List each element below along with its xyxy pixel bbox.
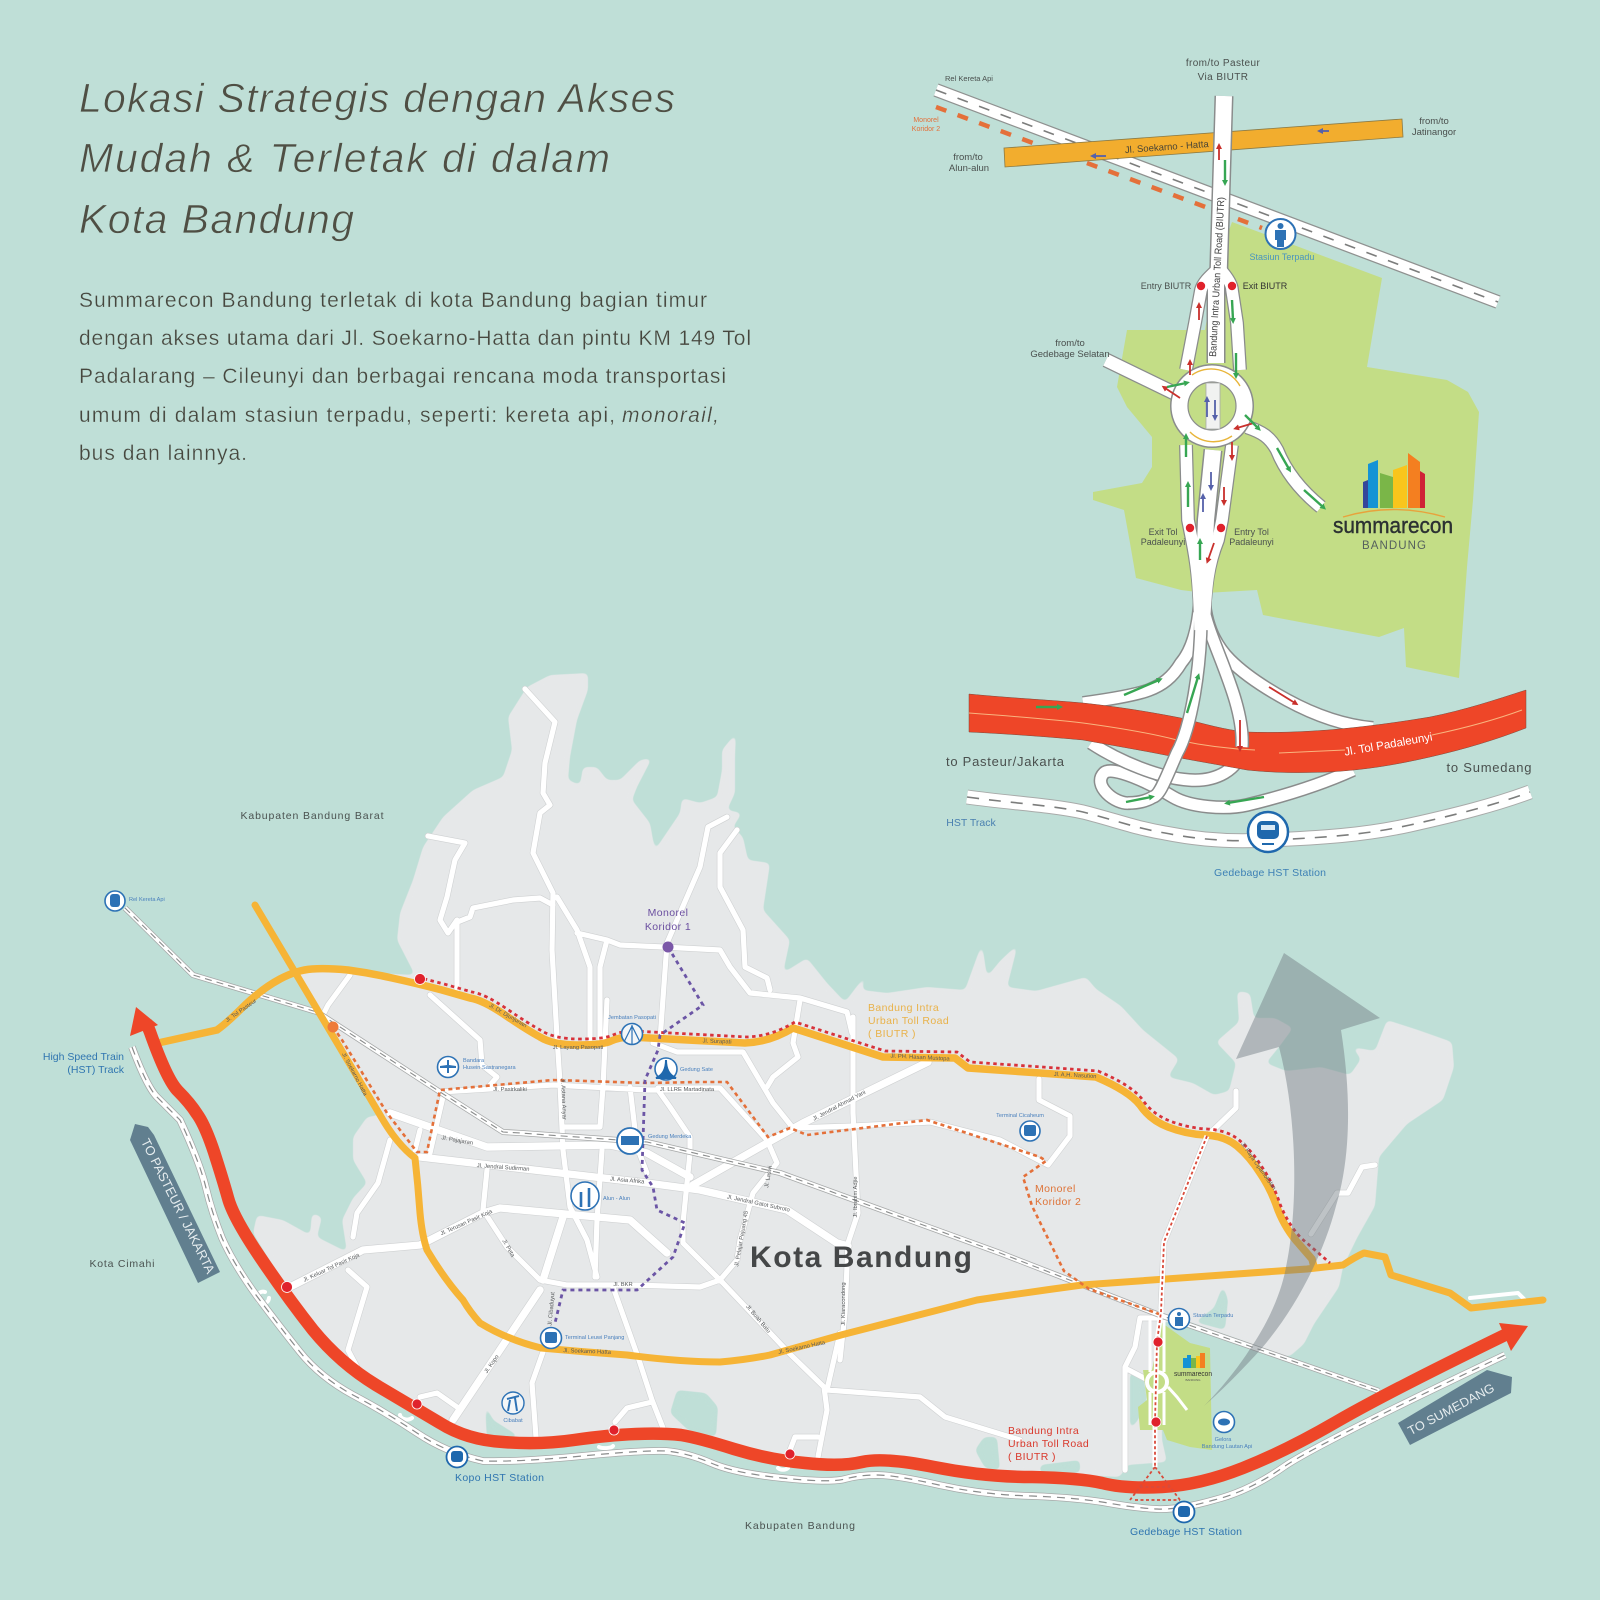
small landmark labels: Alun - Alun: [603, 1196, 630, 1202]
route and station labels: Kopo HST Station: [455, 1472, 544, 1484]
small landmark labels: Bandara: [463, 1058, 485, 1064]
icon: Kopo HST: [446, 1446, 468, 1468]
street labels: Jl. Kopo: [484, 1354, 501, 1375]
water pockets: [485, 1285, 1228, 1473]
icon: Gelora Bandung Lautan Api: [1214, 1412, 1234, 1432]
panel: city map: [43, 673, 1543, 1538]
Jl. Soekarno-Hatta road: Jl. Soekarno - Hatta: [1125, 139, 1210, 156]
title: [79, 75, 675, 242]
interchange labels: from/to: [953, 152, 983, 163]
street labels: Jl. Asia Afrika: [610, 1177, 645, 1186]
small logo: summarecon: [1174, 1371, 1212, 1378]
red toll road arrow: [130, 1007, 1528, 1488]
route and station labels: [43, 907, 1242, 1538]
street labels: Jl. Cibaduyut: [548, 1292, 556, 1326]
street labels: Jl. Soekarno Hatta: [778, 1340, 826, 1356]
body text: bus dan lainnya.: [79, 442, 247, 465]
small logo: BANDUNG: [1185, 1378, 1201, 1382]
route and station labels: ( BIUTR ): [1008, 1451, 1056, 1463]
interchange labels: Gedebage Selatan: [1030, 349, 1110, 360]
ramps over toll: [1128, 605, 1242, 803]
entry and exit dots: [1186, 282, 1236, 532]
small landmark labels: Gelora: [1215, 1437, 1232, 1443]
roundabout: [1170, 364, 1254, 448]
street labels: Jl. Laswi: [764, 1165, 774, 1188]
icon: Jembatan Pasopati: [622, 1024, 642, 1044]
railway line: [936, 90, 1498, 302]
street labels: Jl. Pelajar Pejuang 45: [734, 1211, 750, 1267]
big translucent direction arrow: [1204, 953, 1380, 1406]
interchange labels: Jatinangor: [1412, 127, 1456, 138]
small landmark labels: Bandung Lautan Api: [1202, 1444, 1252, 1450]
street labels: Jl. Tol Pasteur: [225, 998, 258, 1024]
interchange labels: Gedebage HST Station: [1214, 867, 1326, 879]
icon: Stasiun Terpadu: [1266, 219, 1296, 249]
BIUTR connector dashed: [1130, 1136, 1207, 1500]
interchange labels: Koridor 2: [912, 126, 940, 133]
route and station labels: Gedebage HST Station: [1130, 1526, 1242, 1538]
interchange labels: to Pasteur/Jakarta: [946, 754, 1065, 769]
street labels: Jl. Pajajaran: [441, 1135, 473, 1147]
small landmark labels: Husein Sastranegara: [463, 1065, 516, 1071]
small landmark labels: Stasiun Terpadu: [1193, 1313, 1233, 1319]
route and station labels: Monorel: [648, 907, 688, 919]
street labels: Jl. Terusan Pasir Koja: [440, 1209, 494, 1237]
small landmark labels: Cibabat: [503, 1418, 523, 1424]
route and station labels: Bandung Intra: [1008, 1425, 1079, 1437]
interchange labels: [912, 58, 1532, 879]
logo: Summarecon Bandung: [1333, 453, 1453, 552]
monorail corridor 2 dashes: [936, 107, 1262, 228]
HST track lower map: [132, 1047, 1505, 1509]
Jl. Soekarno-Hatta road: [1004, 119, 1403, 167]
street labels: Jl. Layang Pasopati: [553, 1045, 603, 1051]
body text: Summarecon Bandung terletak di kota Bandung bagian timur: [79, 289, 707, 312]
street labels: Jl. Jendral Gatot Subroto: [726, 1194, 790, 1214]
street labels: Jl. Jendral Sudirman: [477, 1163, 530, 1173]
yellow road: Soekarno-Hatta: [255, 905, 1543, 1362]
street labels: Jl. Astana Anyar: [559, 1078, 567, 1120]
map icons: [105, 891, 1234, 1522]
interchange labels: Exit Tol: [1149, 527, 1177, 537]
street labels: Jl. Kiaracondong: [841, 1282, 847, 1326]
yellow road: BIUTR north: [158, 969, 1314, 1267]
toll gate dots: [282, 974, 1163, 1459]
street labels: Jl. Peta: [500, 1239, 516, 1259]
route and station labels: Urban Toll Road: [868, 1015, 949, 1027]
small site plot: [1138, 1320, 1212, 1450]
street labels: Jl. Soekarno Hatta: [563, 1348, 612, 1356]
street labels: Jl. Buah Batu: [744, 1304, 771, 1334]
HST track: [967, 792, 1530, 841]
street labels: Jl. Jendral Ahmad Yani: [812, 1090, 867, 1123]
route and station labels: ( BIUTR ): [868, 1028, 916, 1040]
street labels: Jl. LLRE Martadinata: [660, 1087, 715, 1093]
interchange labels: to Sumedang: [1446, 760, 1532, 775]
interchange labels: Monorel: [913, 117, 939, 124]
street labels: Jl. Raya Cipamokolan: [1239, 1142, 1276, 1191]
land area Kota Bandung: [253, 673, 1454, 1477]
panel: interchange diagram: [912, 58, 1532, 879]
small landmark labels: [129, 897, 1252, 1450]
site plot green: [1093, 222, 1479, 678]
route and station labels: Bandung Intra: [868, 1002, 939, 1014]
route and station labels: (HST) Track: [67, 1064, 125, 1076]
place name labels: Kabupaten Bandung: [745, 1520, 855, 1532]
title: Mudah & Terletak di dalam: [79, 135, 610, 181]
street labels: Jl. PH. Hasan Mustopa: [890, 1053, 951, 1063]
street labels: Jl. Soekarno Hatta: [340, 1052, 368, 1098]
interchange labels: HST Track: [946, 817, 996, 829]
icon: Gedung Merdeka: [617, 1128, 643, 1154]
ramps under toll: [1083, 600, 1373, 807]
interchange labels: Padaleunyi: [1229, 537, 1274, 547]
place name labels: Kota Cimahi: [90, 1258, 154, 1270]
Monorel Koridor 1 route: [555, 947, 703, 1323]
interchange labels: Entry Tol: [1234, 527, 1269, 537]
street labels: Jl. A.H. Nasution: [1053, 1072, 1097, 1080]
interchange labels: Entry BIUTR: [1141, 281, 1192, 291]
small landmark labels: Terminal Leuwi Panjang: [565, 1335, 624, 1341]
interchange labels: from/to: [1419, 116, 1449, 127]
Monorel Koridor 2 route: [333, 1027, 1159, 1314]
BIUTR road vertical label: Bandung Intra Urban Toll Road (BIUTR): [1208, 197, 1227, 357]
direction arrows: [1036, 131, 1329, 803]
interchange labels: Rel Kereta Api: [945, 74, 993, 83]
route and station labels: Koridor 2: [1035, 1196, 1081, 1208]
icon: Terminal Cicaheum: [1020, 1121, 1040, 1141]
small landmark labels: Gedung Merdeka: [648, 1134, 692, 1140]
icon: Cibabat: [502, 1392, 524, 1414]
Monorel corridor end dots: [328, 942, 674, 1032]
route and station labels: Urban Toll Road: [1008, 1438, 1089, 1450]
place name labels: Kabupaten Bandung Barat: [240, 810, 384, 822]
direction sign: to Sumedang: [1398, 1370, 1512, 1445]
body text: [79, 289, 751, 465]
Jl. Tol Padaleunyi red road: Jl. Tol Padaleunyi: [1343, 731, 1433, 759]
small landmark labels: Gedung Sate: [680, 1067, 713, 1073]
place name labels: [90, 810, 972, 1532]
logo: Summarecon Bandung: BANDUNG: [1362, 540, 1426, 552]
BIUTR road trunk and branches: [1106, 96, 1321, 630]
icon: Stasiun Terpadu small: [1168, 1308, 1190, 1330]
street labels: [225, 998, 1276, 1375]
small landmark labels: Jembatan Pasopati: [608, 1015, 656, 1021]
interchange labels: from/to Pasteur: [1186, 58, 1260, 69]
route and station labels: High Speed Train: [43, 1051, 124, 1063]
body text: monorail,: [622, 404, 719, 427]
street labels: Jl. Pasirkaliki: [493, 1087, 527, 1093]
interchange labels: Exit BIUTR: [1243, 281, 1288, 291]
title: Lokasi Strategis dengan Akses: [79, 75, 675, 121]
small logo: [1174, 1353, 1212, 1382]
route and station labels: Koridor 1: [645, 921, 691, 933]
logo: Summarecon Bandung: summarecon: [1333, 513, 1453, 538]
interchange labels: Alun-alun: [949, 163, 989, 174]
route and station labels: Monorel: [1035, 1183, 1076, 1195]
BIUTR dotted red route: [417, 977, 1330, 1263]
title: Kota Bandung: [79, 196, 354, 242]
icon: Bandara: [438, 1056, 458, 1078]
icon: Terminal Leuwi Panjang: [540, 1328, 562, 1348]
icon: Rel Kereta Api: [105, 891, 125, 911]
Jl. Tol Padaleunyi red road: [969, 690, 1526, 773]
icon: Gedung Sate: [655, 1058, 677, 1080]
icon: Alun-Alun: [571, 1182, 599, 1210]
icon: Gedebage HST Station: [1248, 812, 1288, 852]
road network: [257, 689, 1525, 1470]
street labels: Jl. BKR: [613, 1282, 633, 1288]
small landmark labels: Terminal Cicaheum: [996, 1113, 1044, 1119]
street labels: Jl. Surapati: [702, 1038, 732, 1046]
small landmark labels: Rel Kereta Api: [129, 897, 165, 903]
interchange labels: Stasiun Terpadu: [1250, 252, 1314, 262]
street labels: Jl. Keluar Tol Pasir Koja: [303, 1252, 361, 1284]
interchange labels: from/to: [1055, 338, 1085, 349]
street labels: Jl. Ibrahim Adjie: [853, 1177, 859, 1217]
body text: umum di dalam stasiun terpadu, seperti: kereta api,: [79, 404, 615, 427]
direction sign: to Sumedang: TO SUMEDANG: [1405, 1381, 1497, 1438]
interchange labels: Via BIUTR: [1198, 72, 1248, 83]
body text: Padalarang – Cileunyi dan berbagai rencana moda transportasi: [79, 365, 726, 388]
icon: Gedebage HST lower: [1174, 1502, 1194, 1522]
railway lower map: [125, 908, 1379, 1391]
body text: dengan akses utama dari Jl. Soekarno-Hatta dan pintu KM 149 Tol: [79, 327, 751, 350]
interchange labels: Padaleunyi: [1141, 537, 1185, 547]
place name labels: Kota Bandung: [750, 1241, 972, 1274]
street labels: Jl. Dr. Djunjunan: [488, 1003, 527, 1029]
direction sign: to Pasteur / Jakarta: TO PASTEUR / JAKARTA: [138, 1136, 218, 1276]
